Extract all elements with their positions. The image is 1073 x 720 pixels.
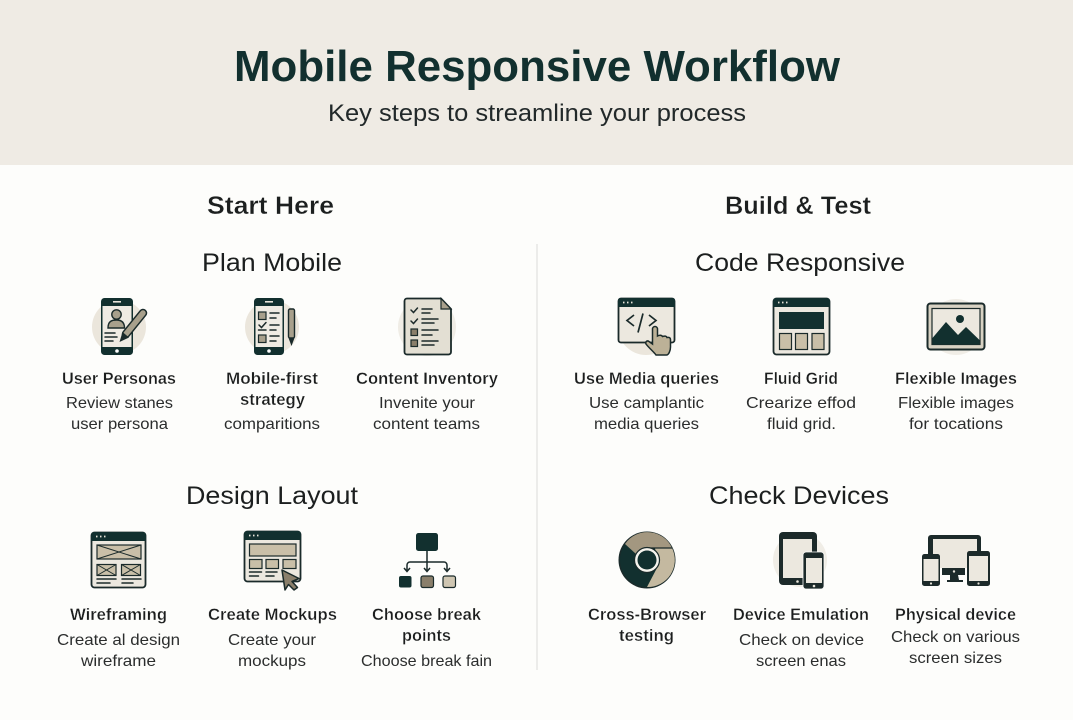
title: Mobile Responsive Workflow — [234, 42, 841, 91]
section heading: Check Devices: Check Devices — [709, 482, 889, 510]
section heading: Code Responsive: Code Responsive — [695, 249, 905, 277]
section heading: Design Layout: Design Layout — [186, 482, 358, 510]
icon: document checklist — [398, 298, 456, 356]
description: Check on various — [891, 629, 1020, 646]
icon: phone with persona and pencil — [92, 298, 146, 355]
icon: mockup window with cursor — [244, 531, 301, 590]
label: User Personas — [62, 370, 176, 388]
card: Physical device — [891, 535, 1020, 667]
card: Cross-Browser testing — [588, 532, 707, 645]
section heading: Plan Mobile: Plan Mobile — [202, 249, 342, 277]
label: Content Inventory — [356, 370, 499, 388]
description line 2: for tocations — [909, 416, 1003, 433]
description line 2: wireframe — [80, 653, 156, 670]
icon: grid layout window — [773, 298, 830, 354]
card: Create Mockups — [208, 531, 337, 670]
card: Wireframing — [57, 532, 180, 670]
label line 2: points — [402, 627, 451, 645]
card: Content Inventory — [356, 298, 499, 433]
label: Physical device — [895, 606, 1016, 624]
card: Mobile-first strategy — [224, 298, 320, 433]
description: Crearize effod — [746, 395, 856, 412]
label: Device Emulation — [733, 606, 869, 624]
description line 2: fluid grid. — [767, 416, 836, 433]
description: Flexible images — [898, 395, 1014, 412]
icon: browser logo — [618, 532, 676, 588]
description: Create al design — [57, 632, 180, 649]
card: Use Media queries — [574, 298, 719, 433]
label: Mobile-first — [226, 370, 319, 388]
label line 2: testing — [619, 627, 674, 645]
description line 2: screen sizes — [909, 650, 1002, 667]
label: Use Media queries — [574, 370, 719, 388]
column heading: Start Here: Start Here — [207, 192, 334, 220]
description: Choose break fain — [361, 653, 492, 670]
label: Flexible Images — [895, 370, 1017, 388]
description line 2: mockups — [238, 653, 306, 670]
icon: tablet and phone — [773, 532, 827, 589]
card: User Personas — [62, 298, 176, 433]
icon: framed landscape image — [928, 299, 984, 355]
description: Use camplantic — [589, 395, 704, 412]
icon: code window with hand cursor — [618, 298, 675, 355]
description line 2: media queries — [594, 416, 699, 433]
icon: wireframe window — [91, 532, 146, 588]
card: Device Emulation — [733, 532, 869, 670]
icon: breakpoint hierarchy — [399, 533, 456, 588]
description: Create your — [228, 632, 317, 649]
icon: phone checklist and pencil — [245, 298, 299, 355]
description: Check on device — [739, 632, 864, 649]
description: Invenite your — [379, 395, 476, 412]
icon: monitor, phone and tablet — [922, 535, 990, 586]
label: Choose break — [372, 606, 482, 624]
header band — [0, 0, 1073, 165]
card: Fluid Grid — [746, 298, 856, 433]
label: Cross-Browser — [588, 606, 707, 624]
card: Choose break points — [361, 533, 492, 670]
label line 2: strategy — [240, 391, 306, 409]
label: Fluid Grid — [764, 370, 838, 388]
column heading: Build & Test: Build & Test — [725, 192, 872, 220]
label: Wireframing — [70, 606, 167, 624]
description: comparitions — [224, 416, 320, 433]
description line 2: screen enas — [756, 653, 846, 670]
description: Review stanes — [66, 395, 173, 412]
subtitle: Key steps to streamline your process — [328, 100, 746, 127]
card: Flexible Images — [895, 299, 1017, 433]
description line 2: user persona — [71, 416, 168, 433]
description line 2: content teams — [373, 416, 480, 433]
label: Create Mockups — [208, 606, 337, 624]
